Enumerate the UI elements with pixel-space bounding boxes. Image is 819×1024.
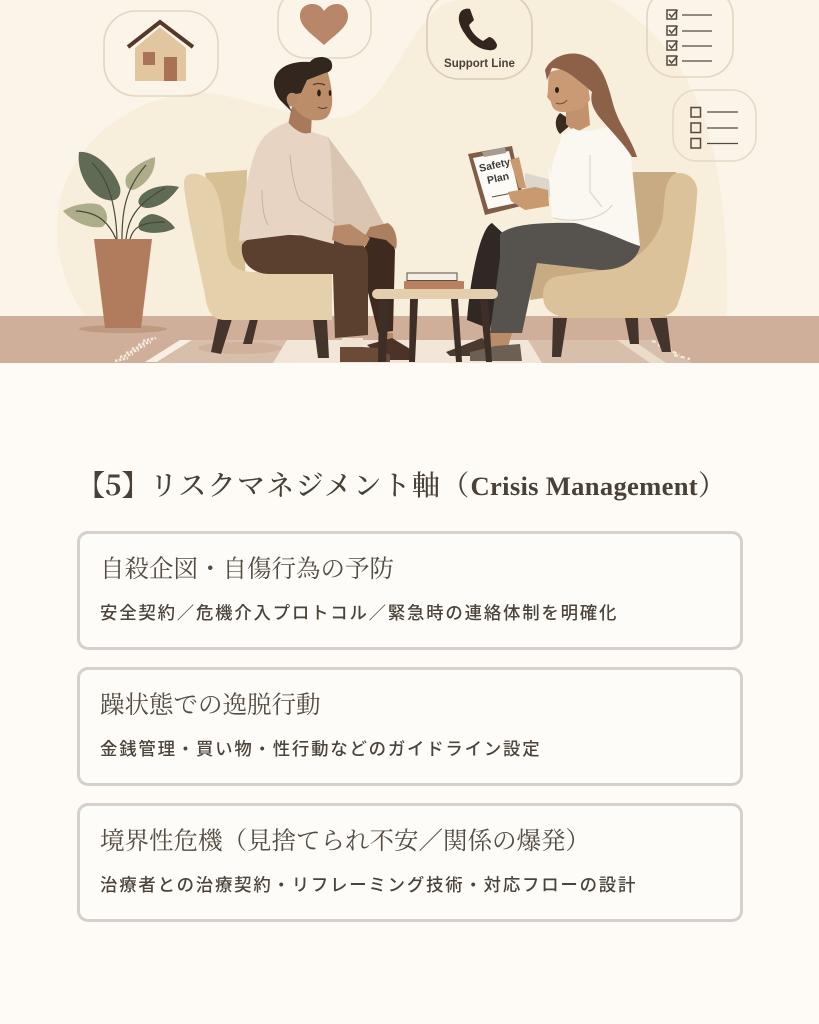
card: borderline crisis [77, 803, 743, 922]
card: suicide and self-harm prevention [77, 531, 743, 650]
hair [545, 54, 637, 157]
card title: 境界性危機（見捨てられ不安／関係の爆発） [100, 822, 590, 857]
near leg [490, 223, 640, 333]
neck [566, 102, 590, 133]
icon bubble: support line [427, 0, 532, 79]
sweater [239, 122, 334, 244]
far leg [365, 228, 395, 333]
label: Support Line: Support Line [444, 58, 515, 70]
floor [0, 316, 819, 363]
illustration: counseling scene [0, 0, 819, 363]
card title: 躁状態での逸脱行動 [100, 686, 320, 721]
head [292, 70, 332, 120]
armchair: left [184, 170, 332, 358]
sweater [550, 127, 640, 246]
neck [288, 106, 312, 134]
icon bubble: filled checklist [647, 0, 733, 77]
ankle [484, 331, 512, 347]
icon bubble: house [104, 11, 218, 96]
hands [332, 224, 370, 246]
clipboard: safety plan: Plan [486, 170, 510, 187]
shoes [342, 338, 363, 347]
heading: 【5】リスクマネジメント軸（Crisis Management） [77, 464, 727, 504]
icon bubble: empty checklist [673, 90, 756, 161]
coffee table with books [372, 273, 498, 362]
clipboard: safety plan: Safety [478, 156, 512, 175]
person: woman [446, 54, 640, 361]
shoes [446, 338, 492, 356]
far sleeve [328, 137, 384, 236]
hair back [556, 113, 574, 134]
far arm [525, 173, 552, 197]
card: deviant behavior in manic state [77, 667, 743, 786]
card description: 金銭管理・買い物・性行動などのガイドライン設定 [100, 736, 541, 761]
face [547, 62, 590, 112]
far leg [467, 223, 510, 329]
clipboard: safety plan [468, 146, 612, 220]
card description: 安全契約／危機介入プロトコル／緊急時の連絡体制を明確化 [100, 600, 618, 625]
person: man [239, 57, 415, 362]
plant [63, 152, 179, 333]
card description: 治療者との治療契約・リフレーミング技術・対応フローの設計 [100, 872, 637, 897]
armchair: right [530, 172, 697, 357]
card title: 自殺企図・自傷行為の予防 [100, 550, 394, 585]
icon bubble: heart [278, 0, 371, 58]
near leg [242, 235, 368, 338]
